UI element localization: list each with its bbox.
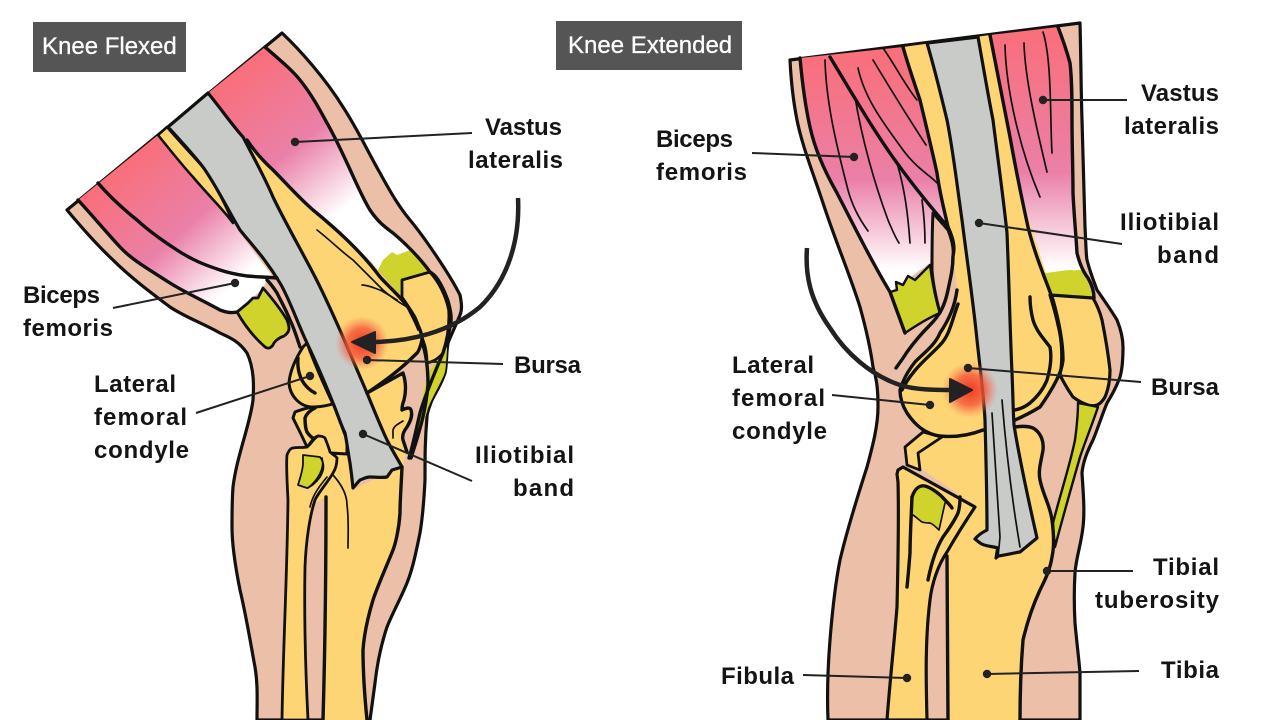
label: Vastus lateralis left: lateralis bbox=[468, 147, 563, 174]
label: Biceps femoris left: Biceps bbox=[23, 282, 100, 309]
skin pocket bbox=[932, 213, 953, 313]
biceps tendon bbox=[237, 288, 289, 348]
label: Iliotibial band left bbox=[359, 430, 574, 502]
green tendon above patella bbox=[378, 250, 428, 297]
heading: Knee Extended: Knee Extended bbox=[568, 32, 732, 59]
label: Biceps femoris left: femoris bbox=[23, 315, 113, 342]
tibia bbox=[918, 427, 1054, 720]
label: Vastus lateralis left: Vastus bbox=[485, 114, 562, 141]
label: Lateral femoral condyle left: femoral bbox=[94, 404, 187, 431]
iliotibial band bbox=[168, 93, 402, 488]
green patellar tendon bbox=[410, 347, 447, 449]
tibial plateau left bbox=[293, 403, 347, 454]
bursa inflammation: right bbox=[942, 362, 998, 418]
label: Fibula bbox=[721, 663, 911, 690]
muscle: biceps femoris bbox=[78, 135, 273, 313]
heading: Knee Extended bbox=[556, 21, 742, 70]
label: Tibial tuberosity: Tibial bbox=[1153, 554, 1219, 581]
label: Biceps femoris right bbox=[656, 126, 858, 186]
tibia upper right plateau bbox=[367, 373, 412, 467]
label: Vastus lateralis right: Vastus bbox=[1141, 80, 1219, 107]
green tendon above patella bbox=[1043, 270, 1093, 298]
label: Bursa right bbox=[964, 364, 1220, 401]
femur bbox=[243, 137, 422, 393]
fibula bbox=[887, 467, 975, 720]
patella bbox=[402, 272, 451, 363]
lower tibia bbox=[312, 440, 402, 720]
label: Tibial tuberosity bbox=[1043, 554, 1220, 614]
right knee illustration: extended bbox=[790, 23, 1123, 720]
condyle bbox=[289, 343, 333, 407]
green tendon bbox=[890, 265, 940, 333]
label: Tibial tuberosity: tuberosity bbox=[1095, 587, 1220, 614]
skin outline bbox=[67, 33, 462, 720]
patella bbox=[1050, 295, 1110, 406]
label: Iliotibial band left: band bbox=[513, 475, 574, 502]
femur bbox=[900, 35, 1063, 436]
left knee illustration: flexed bbox=[67, 33, 462, 720]
label: Iliotibial band right bbox=[975, 209, 1219, 269]
bursa inflammation: left bbox=[335, 316, 389, 370]
label: Fibula: Fibula bbox=[721, 663, 795, 690]
tibia plateau edge bbox=[367, 373, 412, 452]
tendril bbox=[393, 421, 403, 438]
fibula head green bbox=[298, 455, 323, 488]
label: Bursa left bbox=[363, 352, 582, 379]
iliotibial band bbox=[927, 37, 1037, 558]
label: Lateral femoral condyle right: condyle bbox=[732, 418, 827, 445]
skin outline bbox=[790, 23, 1123, 720]
heading: Knee Flexed: Knee Flexed bbox=[42, 33, 177, 60]
label: Biceps femoris right: Biceps bbox=[656, 126, 733, 153]
fibula head green bbox=[913, 487, 945, 530]
label: Iliotibial band right: Iliotibial bbox=[1120, 209, 1219, 236]
femur strip bbox=[158, 127, 233, 223]
label: Bursa right: Bursa bbox=[1151, 374, 1220, 401]
label: Lateral femoral condyle left bbox=[94, 371, 314, 464]
label: Vastus lateralis right: lateralis bbox=[1124, 113, 1219, 140]
heading: Knee Flexed bbox=[33, 22, 186, 72]
anatomical contour lines bbox=[800, 27, 1094, 720]
label: Vastus lateralis right bbox=[1039, 80, 1219, 140]
muscle: vastus lateralis bbox=[990, 27, 1082, 273]
muscle: vastus lateralis bbox=[208, 47, 430, 272]
label: Iliotibial band right: band bbox=[1157, 242, 1219, 269]
anatomical contour lines bbox=[78, 47, 449, 720]
label: Bursa left: Bursa bbox=[514, 352, 582, 379]
fibula bbox=[282, 436, 337, 720]
label: Lateral femoral condyle right: Lateral bbox=[732, 352, 814, 379]
label: Tibia bbox=[983, 657, 1220, 684]
tibial strip bbox=[905, 432, 942, 470]
green patellar tendon bbox=[1053, 403, 1098, 547]
label: Biceps femoris right: femoris bbox=[656, 159, 747, 186]
label: Lateral femoral condyle left: condyle bbox=[94, 437, 189, 464]
label: Tibia: Tibia bbox=[1161, 657, 1220, 684]
label: Lateral femoral condyle right bbox=[732, 352, 934, 445]
label: Iliotibial band left: Iliotibial bbox=[475, 442, 574, 469]
label: Lateral femoral condyle left: Lateral bbox=[94, 371, 176, 398]
label: Vastus lateralis left bbox=[291, 114, 563, 174]
arrow: right bbox=[807, 248, 972, 402]
muscle: biceps femoris bbox=[800, 47, 948, 292]
label: Lateral femoral condyle right: femoral bbox=[732, 385, 825, 412]
label: Biceps femoris left bbox=[23, 279, 239, 342]
arrow: left bbox=[352, 198, 518, 353]
